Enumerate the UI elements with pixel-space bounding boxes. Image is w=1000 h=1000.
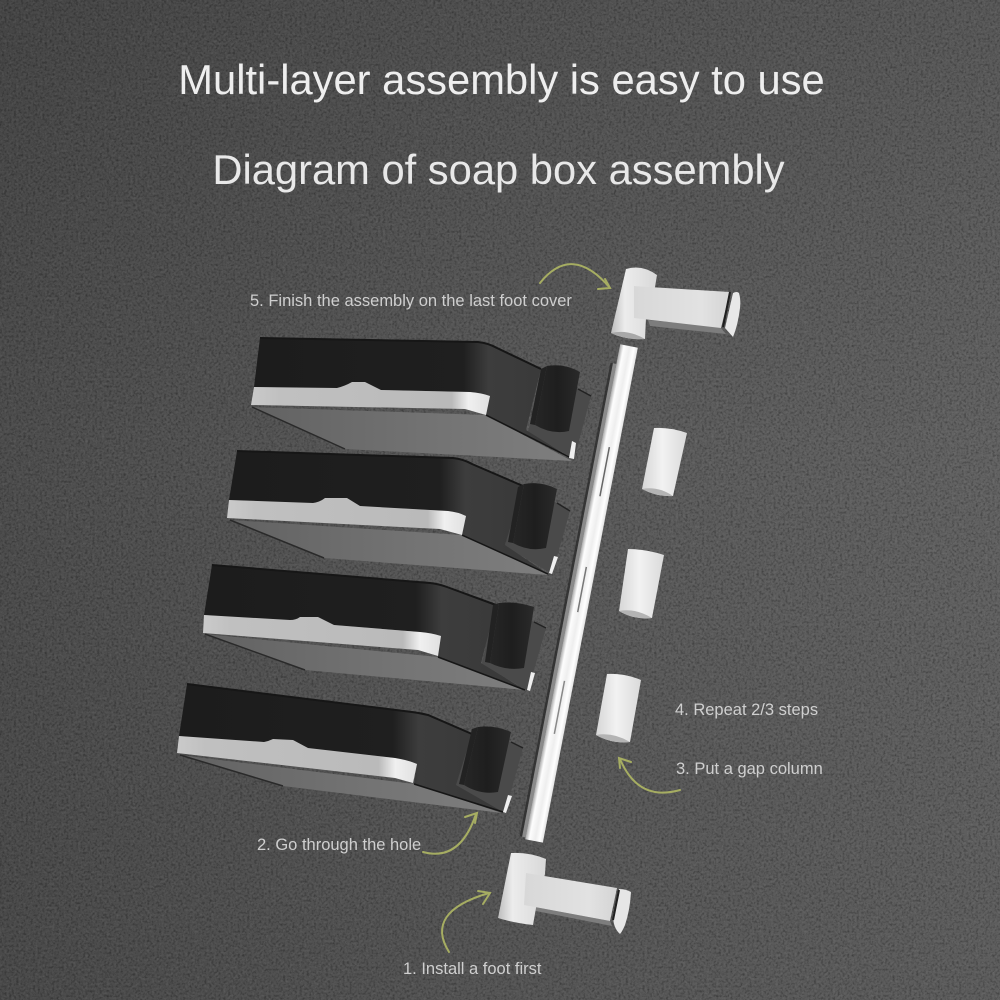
label: step 2: 2. Go through the hole bbox=[257, 836, 421, 854]
arrow: to top foot bbox=[540, 264, 610, 289]
title: Multi-layer assembly is easy to use bbox=[178, 56, 825, 103]
label: step 4: 4. Repeat 2/3 steps bbox=[675, 701, 818, 719]
arrow: to hole bbox=[423, 813, 477, 854]
soap box 2 bbox=[227, 451, 570, 575]
label: step 5: 5. Finish the assembly on the last foot cover bbox=[250, 292, 572, 310]
soap box 3 bbox=[203, 565, 546, 691]
top foot cover bbox=[611, 267, 740, 339]
arrow: to gap column bbox=[619, 758, 680, 793]
spacer column 3 bbox=[596, 674, 641, 742]
spacer column 1 bbox=[642, 428, 687, 496]
label: step 1: 1. Install a foot first bbox=[403, 960, 542, 978]
arrow: to bottom foot bbox=[442, 891, 490, 952]
rod bbox=[519, 343, 638, 843]
spacer column 2 bbox=[619, 549, 664, 618]
bottom foot bbox=[498, 853, 631, 934]
soap box 1 bbox=[251, 338, 591, 461]
subtitle: Diagram of soap box assembly bbox=[212, 146, 785, 193]
soap box 4 bbox=[177, 684, 523, 813]
label: step 3: 3. Put a gap column bbox=[676, 760, 823, 778]
